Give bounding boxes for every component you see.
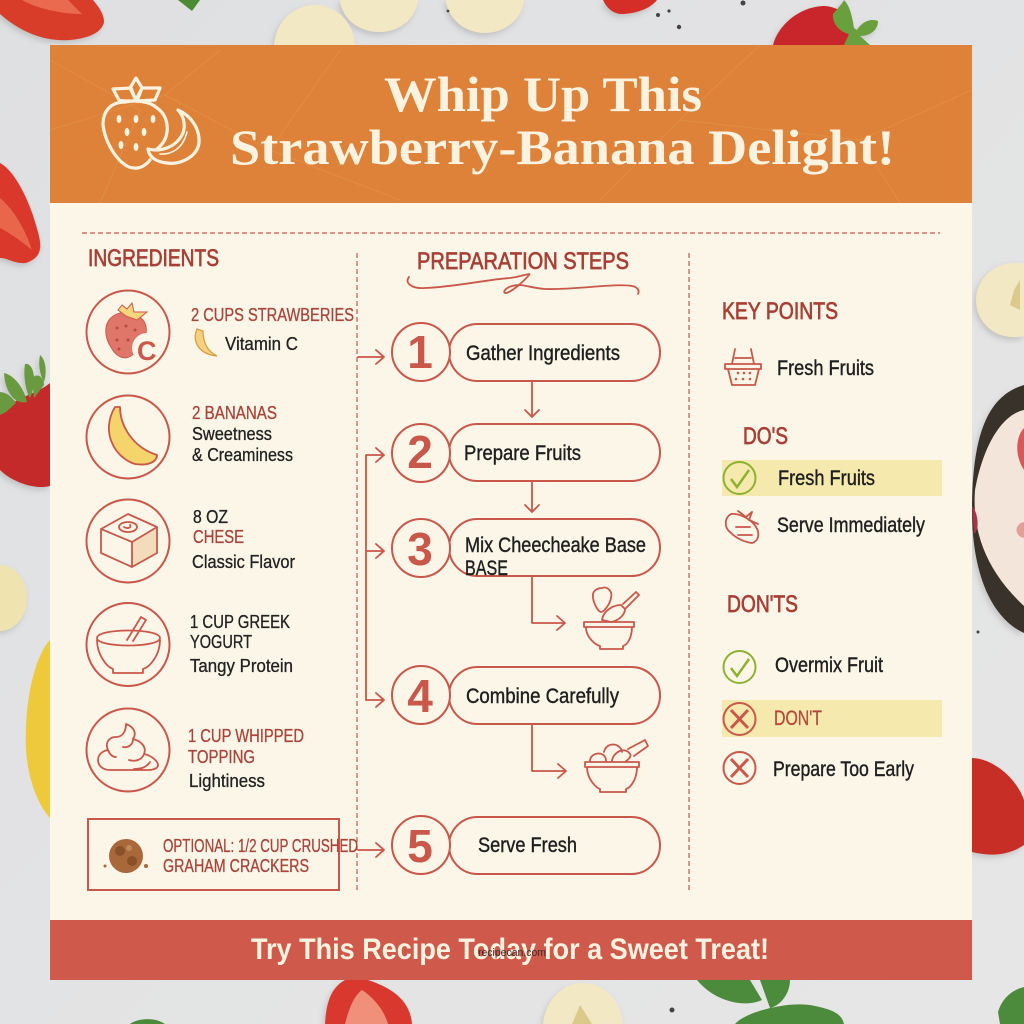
ingredient: whipped topping (86, 708, 304, 792)
step 1 (392, 323, 660, 381)
strawberries top (603, 0, 878, 45)
ingredient: bananas: Sweetness (192, 424, 272, 444)
strawberry slice bottom (325, 980, 412, 1024)
step 4: 4 (407, 670, 433, 722)
ingredient: bananas: & Creaminess (192, 445, 293, 465)
step 5: 5 (407, 820, 433, 872)
ingredient: cheese: Classic Flavor (192, 552, 295, 572)
ingredient: bananas: 2 BANANAS (192, 403, 277, 423)
banana slice bottom (543, 983, 623, 1024)
icon: bowl with whisk and strawberry (584, 588, 639, 649)
bowl right (972, 385, 1024, 633)
banana slices top (274, 0, 524, 45)
mint leaves (130, 980, 1024, 1024)
title (230, 66, 895, 175)
footer banner: recipecan.com (478, 947, 546, 959)
ingredient: whipped topping: 1 CUP WHIPPED (188, 726, 304, 746)
ingredient: optional graham crackers (88, 819, 358, 890)
panel: card background (50, 203, 972, 920)
step 4: Combine Carefully (466, 685, 619, 708)
ingredient: optional graham crackers: OPTIONAL: 1/2 CUP CRUSHED (163, 836, 358, 856)
ingredient: whipped topping: Lightiness (189, 771, 265, 791)
panel: preparation steps (358, 248, 660, 874)
dividers (82, 233, 940, 890)
ingredient: cheese (86, 500, 295, 582)
strawberry right (972, 758, 1024, 855)
step 5 (392, 816, 660, 874)
step 5: Serve Fresh (478, 834, 577, 857)
step 3: Mix Cheecheake Base (465, 534, 646, 557)
icon: bowl with fruit (585, 740, 648, 792)
banana slice left (0, 565, 27, 631)
don't: overmix fruit (724, 651, 883, 683)
ingredient: cheese: 8 OZ (193, 507, 228, 527)
ingredient: greek yogurt: YOGURT (190, 632, 252, 652)
heading: preparation steps: PREPARATION STEPS (417, 248, 629, 275)
step 3: 3 (407, 523, 433, 575)
ingredient: greek yogurt: 1 CUP GREEK (190, 612, 290, 632)
ingredient: strawberries: Vitamin C (225, 334, 298, 354)
step 1: 1 (407, 326, 433, 378)
step 2 (392, 424, 660, 482)
do: serve immediately (726, 511, 925, 543)
ingredient: bananas (86, 396, 293, 478)
step 3 (392, 519, 660, 580)
ingredient: cheese: CHESE (193, 527, 244, 547)
footer banner (50, 920, 972, 980)
strawberry slice left (0, 163, 40, 263)
do: fresh fruits highlight (722, 460, 942, 496)
panel: key points, do's and don'ts (722, 298, 942, 784)
icon: basket (725, 349, 761, 385)
panel: key points, do's and don'ts: Fresh Fruits (777, 357, 874, 380)
strawberry slice top-left (0, 0, 104, 40)
connector arrows (358, 350, 566, 857)
ingredient: strawberries (86, 290, 354, 374)
panel: ingredients (86, 245, 358, 890)
don't: highlighted (722, 700, 942, 737)
banana left (26, 640, 50, 818)
step 2: 2 (407, 426, 433, 478)
banana slice right (976, 263, 1024, 337)
don't: prepare too early: Prepare Too Early (773, 758, 914, 781)
title: Whip Up This (384, 66, 702, 122)
mint leaf top (178, 0, 200, 11)
don't: overmix fruit: Overmix Fruit (775, 654, 883, 677)
ingredient: greek yogurt (86, 603, 293, 686)
don't: prepare too early (724, 752, 914, 784)
icon: small banana (195, 329, 217, 356)
whole strawberry left (0, 355, 50, 487)
step 3: BASE (465, 557, 508, 580)
icon: strawberry and banana (103, 78, 199, 168)
heading: do's: DO'S (743, 423, 788, 450)
do: serve immediately: Serve Immediately (777, 514, 925, 537)
ingredient: strawberries: 2 CUPS STRAWBERIES (191, 305, 354, 325)
ingredient: optional graham crackers: GRAHAM CRACKERS (163, 856, 309, 876)
ingredient: greek yogurt: Tangy Protein (190, 656, 293, 676)
step 1: Gather Ingredients (466, 342, 620, 365)
heading: key points: KEY POINTS (722, 298, 838, 325)
step 4 (392, 666, 660, 724)
specks (447, 0, 980, 1012)
ingredient: strawberries: C (137, 336, 156, 366)
do: fresh fruits highlight: Fresh Fruits (778, 467, 875, 490)
step 2: Prepare Fruits (464, 442, 581, 465)
footer banner: Try This Recipe Today for a Sweet Treat! (251, 933, 769, 966)
title: Strawberry-Banana Delight! (230, 119, 895, 175)
ingredient: whipped topping: TOPPING (188, 747, 255, 767)
heading: don'ts: DON'TS (727, 591, 798, 618)
heading: ingredients: INGREDIENTS (88, 245, 219, 272)
don't: highlighted: DON'T (774, 707, 822, 730)
flourish (407, 274, 639, 294)
icon: crumbs (104, 839, 148, 873)
header banner (50, 45, 972, 203)
